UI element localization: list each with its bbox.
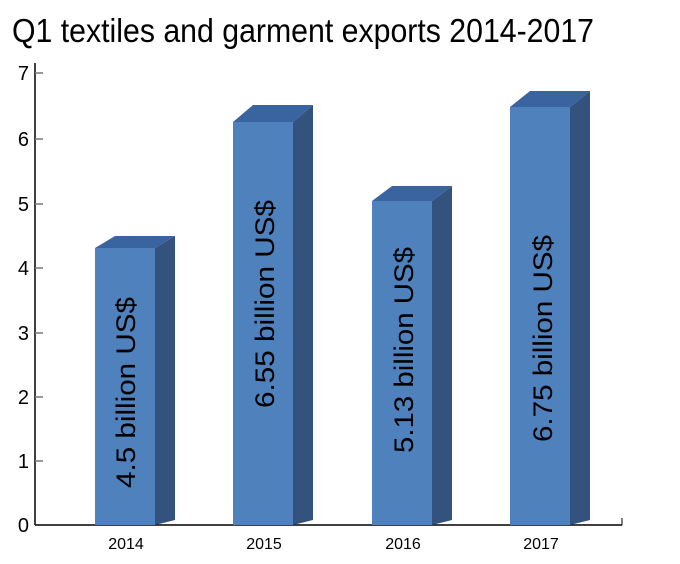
y axis: 1 (18, 451, 29, 473)
bar 2017: 6.75 billion US$ (528, 235, 558, 442)
bar 2014: 4.5 billion US$ (111, 297, 141, 488)
bar 2016: 5.13 billion US$ (389, 247, 419, 453)
x axis: 2015 (246, 536, 282, 553)
bar 2017 (510, 91, 590, 525)
title: Q1 textiles and garment exports 2014-2017 (12, 12, 594, 49)
bar 2015: 6.55 billion US$ (250, 200, 280, 408)
x axis: 2014 (108, 536, 144, 553)
y axis: 2 (18, 387, 29, 409)
bar 2015 (233, 105, 313, 525)
y axis: 3 (18, 323, 29, 345)
x axis: 2017 (523, 536, 559, 553)
bar 2016 (372, 186, 452, 525)
bar 2014 (95, 236, 175, 525)
y axis: 7 (18, 63, 29, 85)
y axis: 6 (18, 129, 29, 151)
x axis: 2016 (385, 536, 421, 553)
y axis: 4 (18, 258, 29, 280)
y axis: 5 (18, 194, 29, 216)
x axis (35, 518, 622, 553)
y axis (18, 63, 43, 537)
y axis: 0 (18, 515, 29, 537)
